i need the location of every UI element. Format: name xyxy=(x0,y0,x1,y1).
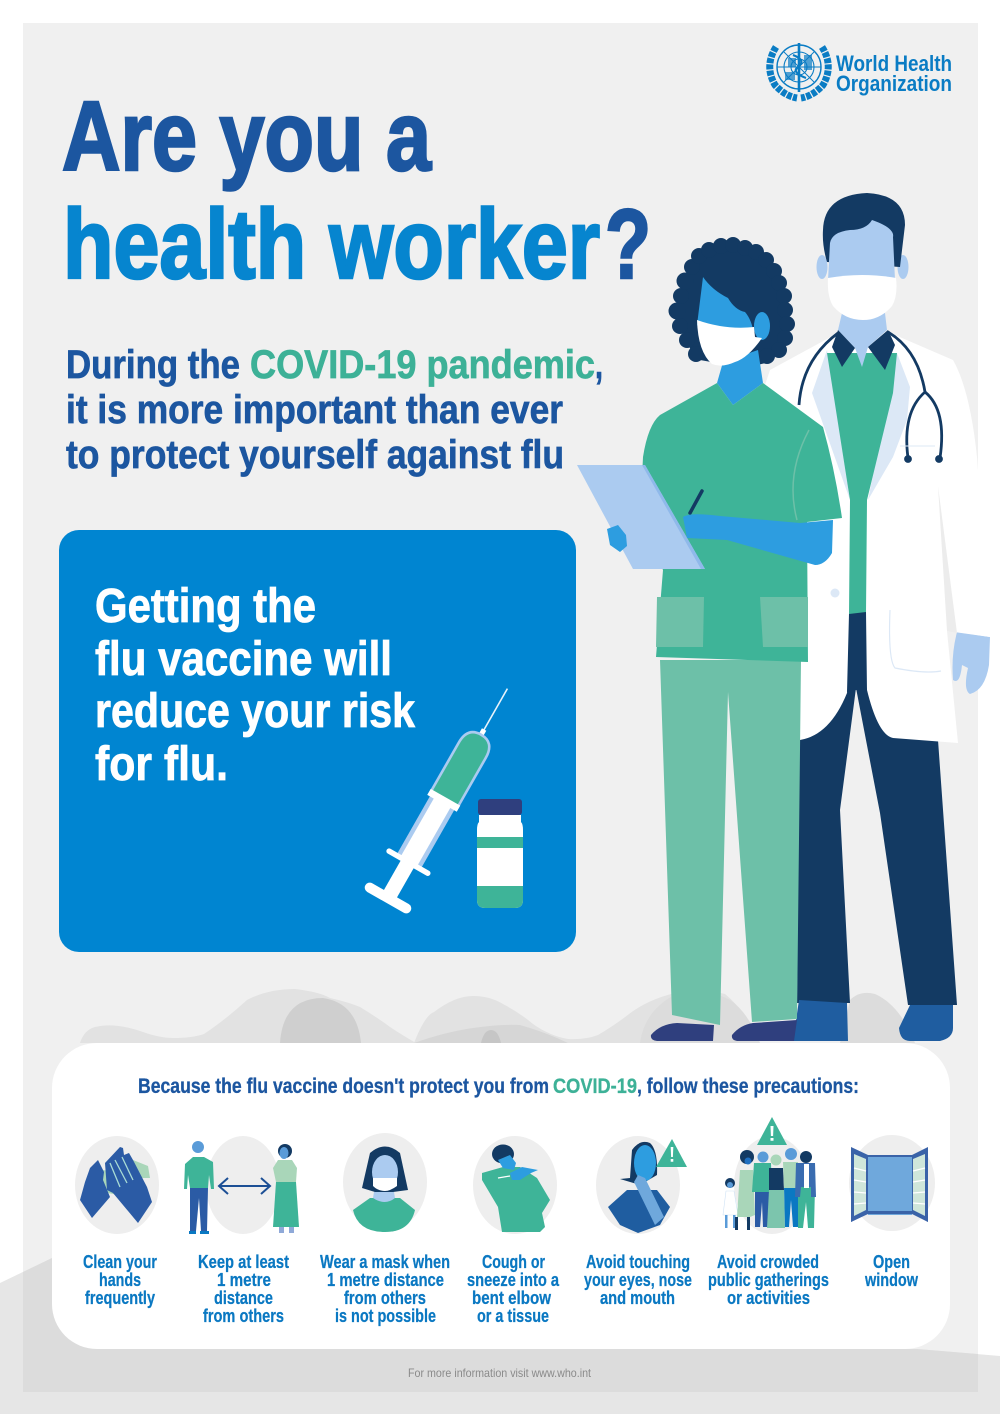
clipboard xyxy=(577,465,705,569)
label: avoid touching: your eyes, nose xyxy=(584,1269,692,1290)
title: health worker xyxy=(63,189,600,299)
doctor shirt xyxy=(827,353,897,615)
man in light top xyxy=(783,1148,800,1227)
woman in skirt xyxy=(767,1154,785,1228)
footer: For more information visit www.who.int xyxy=(408,1366,592,1380)
precautions heading xyxy=(138,1075,859,1098)
label: wear a mask xyxy=(320,1251,450,1326)
panel: precautions xyxy=(52,1043,950,1349)
doctor hair xyxy=(823,193,905,267)
label: keep distance: distance xyxy=(214,1287,273,1308)
coat buttons and pocket xyxy=(830,446,941,672)
label: open window xyxy=(864,1251,918,1290)
precautions heading: COVID-19 xyxy=(553,1075,637,1098)
label: avoid touching: Avoid touching xyxy=(586,1251,690,1272)
icon: syringe xyxy=(363,676,530,915)
icon: avoid crowds xyxy=(723,1117,816,1234)
warning triangle xyxy=(656,1139,687,1167)
nurse neck xyxy=(717,350,763,405)
label: avoid crowds xyxy=(708,1251,829,1308)
title: ? xyxy=(605,189,651,299)
label: keep distance: Keep at least xyxy=(198,1251,289,1272)
woman xyxy=(273,1144,299,1233)
doctor mask xyxy=(828,275,896,320)
label: wear a mask: Wear a mask when xyxy=(320,1251,450,1272)
label: clean hands: frequently xyxy=(85,1287,156,1308)
woman in dress xyxy=(735,1150,755,1230)
label: avoid touching: and mouth xyxy=(600,1287,675,1308)
doctor white coat xyxy=(760,332,990,743)
label: cough: or a tissue xyxy=(477,1305,549,1326)
nurse ear xyxy=(754,312,770,340)
subtitle xyxy=(66,343,603,477)
label: avoid crowds: public gatherings xyxy=(708,1269,829,1290)
doctor trousers xyxy=(797,680,957,1005)
man in jacket xyxy=(795,1151,816,1228)
nurse pockets xyxy=(656,597,808,647)
label: avoid touching xyxy=(584,1251,692,1308)
precautions heading: , follow these precautions: xyxy=(637,1075,859,1098)
doctor shoes xyxy=(793,1000,953,1041)
arrow: two-way distance xyxy=(219,1178,270,1194)
subtitle: it is more important than ever xyxy=(66,388,563,432)
nurse arm xyxy=(683,514,833,565)
nurse hand on clipboard xyxy=(607,525,627,552)
label: cough xyxy=(467,1251,560,1326)
child xyxy=(723,1178,738,1228)
pen xyxy=(690,491,702,513)
doctor neck xyxy=(838,313,887,367)
panel: flu vaccine message xyxy=(59,530,576,952)
nurse hair xyxy=(668,237,795,368)
label: cough: sneeze into a xyxy=(467,1269,560,1290)
label: avoid crowds: Avoid crowded xyxy=(717,1251,819,1272)
icon: wear a mask xyxy=(343,1133,427,1232)
logo: World Health Organization xyxy=(770,43,952,98)
label: avoid crowds: or activities xyxy=(727,1287,810,1308)
nurse face xyxy=(697,277,754,335)
label: open window: Open xyxy=(873,1251,910,1272)
label: clean hands: Clean your xyxy=(83,1251,157,1272)
nurse scrub top xyxy=(640,383,842,662)
stethoscope xyxy=(799,332,942,462)
vaccine message text: flu vaccine will xyxy=(95,633,392,686)
label: keep distance: 1 metre xyxy=(217,1269,271,1290)
logo text: World Health xyxy=(836,51,952,76)
vaccine message text: reduce your risk xyxy=(95,685,415,738)
man xyxy=(184,1141,214,1234)
logo text xyxy=(836,51,952,96)
label: wear a mask: is not possible xyxy=(335,1305,436,1326)
icon: open window xyxy=(849,1135,935,1231)
coat lapels xyxy=(812,350,910,500)
icon: cough into elbow xyxy=(473,1136,557,1234)
label: clean hands: hands xyxy=(99,1269,141,1290)
doctor face xyxy=(828,220,895,280)
precautions heading: Because the flu vaccine doesn't protect you from xyxy=(138,1075,549,1098)
label: cough: bent elbow xyxy=(472,1287,551,1308)
icon: avoid touching face xyxy=(596,1136,687,1234)
title xyxy=(62,81,651,299)
icon: vaccine vial xyxy=(477,799,523,908)
subtitle: COVID-19 pandemic xyxy=(250,343,595,387)
subtitle: During the xyxy=(66,343,240,387)
logo text: Organization xyxy=(836,71,952,96)
icon: clean hands xyxy=(75,1136,159,1234)
label: clean hands xyxy=(83,1251,157,1308)
illustration: nurse xyxy=(577,237,842,1041)
label: wear a mask: from others xyxy=(344,1287,426,1308)
vaccine message text: for flu. xyxy=(95,738,228,791)
doctor collar xyxy=(832,330,895,370)
label: open window: window xyxy=(864,1269,918,1290)
label: keep distance xyxy=(198,1251,289,1326)
label: keep distance: from others xyxy=(203,1305,284,1326)
vaccine message text xyxy=(95,580,415,791)
doctor ears xyxy=(816,255,908,279)
doctor hand xyxy=(952,632,990,694)
nurse shoes xyxy=(651,1020,797,1041)
background hills xyxy=(80,989,915,1043)
nurse mask xyxy=(697,320,762,366)
icon: WHO emblem xyxy=(770,43,828,98)
subtitle: , xyxy=(595,343,603,387)
icon: keep distance xyxy=(184,1136,299,1234)
precaution labels xyxy=(83,1251,918,1326)
nurse trousers xyxy=(660,660,801,1025)
label: cough: Cough or xyxy=(482,1251,545,1272)
man in green xyxy=(752,1152,772,1227)
warning triangle xyxy=(757,1117,787,1145)
label: wear a mask: 1 metre distance xyxy=(327,1269,444,1290)
illustration: doctor xyxy=(760,193,990,1041)
subtitle: to protect yourself against flu xyxy=(66,433,564,477)
title: Are you a xyxy=(62,81,432,191)
vaccine message text: Getting the xyxy=(95,580,316,633)
